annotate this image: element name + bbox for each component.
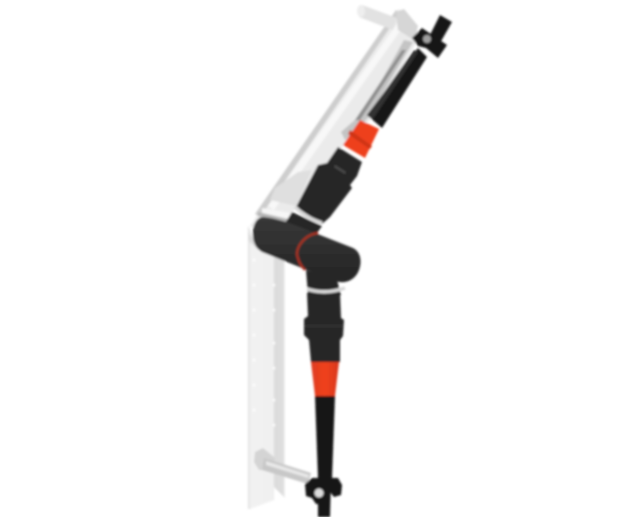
lower bracket	[254, 448, 275, 470]
upper black connector	[296, 147, 362, 224]
lower mounting channel	[248, 226, 311, 509]
red seam	[297, 233, 318, 270]
bottom clamp	[305, 478, 342, 504]
lower peg	[262, 458, 311, 484]
elbow body	[253, 217, 361, 295]
top bracket	[396, 9, 418, 40]
lower red sleeve	[311, 362, 339, 396]
top peg	[357, 5, 397, 30]
top clamp	[412, 28, 447, 58]
upper red sleeve	[343, 120, 379, 158]
upper mounting channel	[250, 5, 420, 232]
channel rivets	[253, 259, 275, 426]
upper cable	[282, 15, 452, 240]
lower cable	[304, 288, 345, 517]
